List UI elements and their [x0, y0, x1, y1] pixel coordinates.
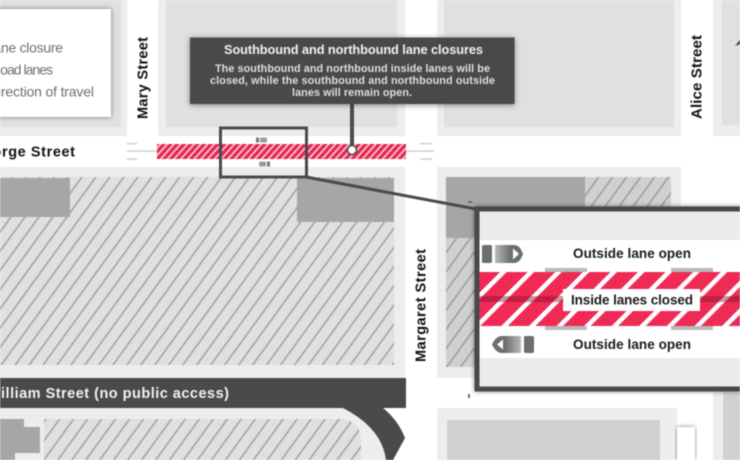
- callout: lane closures: [190, 38, 514, 104]
- callout: lane closures: The southbound and northbound inside lanes will be: [215, 63, 490, 75]
- lane lines east of closure: [406, 143, 434, 160]
- block: bottom centre: [437, 408, 695, 460]
- block: east of Margaret Street: [437, 167, 681, 378]
- label: outside lane open top: Outside lane open: [573, 246, 691, 261]
- callout: lane closures: closed, while the southbound and northbound outside: [210, 75, 495, 87]
- icon: north arrow (clipped): [735, 40, 740, 46]
- callout: lane closures: Southbound and northbound lane closures: [224, 42, 483, 57]
- connector line to inset: [306, 177, 476, 209]
- icon: car heading west: [492, 336, 534, 353]
- icon: small southbound car: [259, 162, 270, 166]
- red hatched lane closure strip: [157, 144, 406, 159]
- callout: lane closures: lanes will remain open.: [292, 87, 412, 99]
- label: outside lane open bottom: Outside lane open: [573, 337, 691, 352]
- tiny corner marks: [468, 201, 472, 398]
- inset road: [480, 240, 740, 358]
- block: hatched site with buildings: [0, 167, 405, 378]
- inset lane dashes: [545, 268, 713, 330]
- block: top left: [0, 0, 127, 136]
- lane lines west of closure: [127, 143, 157, 160]
- inset panel: detail view: [477, 209, 740, 389]
- street label: Mary Street: Mary Street: [136, 37, 152, 119]
- zoom locator box: [220, 128, 306, 177]
- block: top centre: [158, 0, 405, 136]
- block: south of William Street: [0, 408, 395, 460]
- icon: small northbound car: [256, 138, 267, 142]
- street label: Alice Street: Alice Street: [688, 35, 706, 119]
- William Street road: [0, 378, 406, 460]
- icon: car heading east: [482, 245, 523, 263]
- label: inside lanes closed: [563, 289, 700, 311]
- inset closed lanes: [480, 272, 740, 326]
- block: bottom right: [713, 392, 740, 460]
- street label: Margaret Street: Margaret Street: [414, 249, 430, 362]
- callout leader line: [348, 104, 356, 154]
- block: top right: [437, 0, 681, 136]
- block: far top right: [713, 0, 740, 136]
- label: inside lanes closed: Inside lanes closed: [571, 292, 693, 308]
- legend panel: [0, 9, 111, 117]
